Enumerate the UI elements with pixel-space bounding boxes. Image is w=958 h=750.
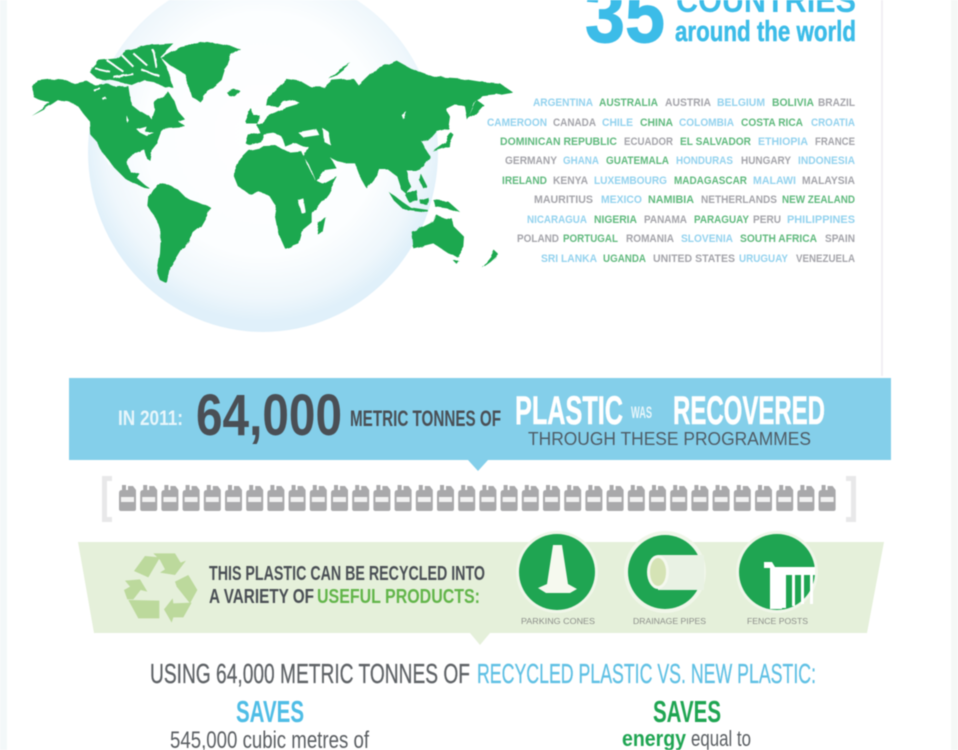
- list of countries: BELGIUM: [717, 97, 765, 109]
- list of countries: DOMINICAN REPUBLIC: [500, 136, 617, 148]
- banner: plastic recovered: METRIC TONNES OF: [350, 406, 501, 431]
- list of countries: GHANA: [563, 155, 599, 167]
- list of countries: SLOVENIA: [681, 233, 733, 245]
- list of countries: PANAMA: [644, 214, 687, 226]
- list of countries: NIGERIA: [594, 214, 637, 226]
- list of countries: [487, 97, 855, 265]
- headline: 35 countries around the world: [585, 0, 856, 59]
- list of countries: SOUTH AFRICA: [740, 233, 817, 245]
- list of countries: ECUADOR: [624, 136, 673, 148]
- list of countries: URUGUAY: [739, 253, 789, 265]
- list of countries: INDONESIA: [798, 155, 855, 167]
- stat: saves water: [170, 694, 369, 750]
- list of countries: CANADA: [553, 117, 596, 129]
- list of countries: CROATIA: [811, 117, 855, 129]
- list of countries: MALAYSIA: [802, 175, 855, 187]
- list of countries: PERU: [753, 214, 781, 226]
- icon: drainage pipes: DRAINAGE PIPES: [633, 616, 706, 626]
- list of countries: CHILE: [602, 117, 633, 129]
- world map: [32, 41, 513, 283]
- list of countries: PARAGUAY: [694, 214, 750, 226]
- list of countries: SRI LANKA: [541, 253, 597, 265]
- panel: recycled products band: [78, 542, 884, 645]
- list of countries: CHINA: [640, 117, 673, 129]
- icon: fence posts: [736, 531, 818, 626]
- text: recycled into useful products: USEFUL PRODUCTS:: [317, 586, 480, 608]
- banner: plastic recovered: IN 2011:: [118, 407, 183, 430]
- list of countries: EL SALVADOR: [680, 136, 751, 148]
- list of countries: HONDURAS: [676, 155, 733, 167]
- list of countries: NAMIBIA: [648, 194, 694, 206]
- list of countries: NETHERLANDS: [701, 194, 777, 206]
- globe: [88, 0, 438, 332]
- list of countries: PORTUGAL: [563, 233, 618, 245]
- list of countries: SPAIN: [825, 233, 855, 245]
- bottle row: [102, 476, 856, 522]
- text: recycled into useful products: A VARIETY OF: [209, 586, 314, 608]
- banner: plastic recovered: THROUGH THESE PROGRAMMES: [528, 429, 811, 449]
- banner: plastic recovered: WAS: [631, 403, 652, 422]
- list of countries: ETHIOPIA: [758, 136, 808, 148]
- list of countries: ROMANIA: [626, 233, 674, 245]
- list of countries: VENEZUELA: [796, 253, 855, 265]
- list of countries: COSTA RICA: [741, 117, 803, 129]
- icon: fence posts: FENCE POSTS: [747, 616, 808, 626]
- list of countries: ARGENTINA: [533, 97, 593, 109]
- text: recycled into useful products: THIS PLASTIC CAN BE RECYCLED INTO: [209, 563, 485, 585]
- heading: using recycled plastic vs new plastic: USING 64,000 METRIC TONNES OF: [150, 658, 470, 689]
- list of countries: MAURITIUS: [534, 194, 593, 206]
- banner: plastic recovered: PLASTIC: [515, 389, 623, 433]
- list of countries: GERMANY: [505, 155, 558, 167]
- icon: drainage pipes: [624, 531, 706, 626]
- list of countries: MADAGASCAR: [674, 175, 747, 187]
- list of countries: IRELAND: [502, 175, 547, 187]
- list of countries: MALAWI: [753, 175, 796, 187]
- banner: plastic recovered: [69, 378, 891, 471]
- list of countries: LUXEMBOURG: [594, 175, 667, 187]
- list of countries: AUSTRIA: [665, 97, 711, 109]
- list of countries: POLAND: [517, 233, 559, 245]
- list of countries: MEXICO: [601, 194, 642, 206]
- list of countries: AUSTRALIA: [599, 97, 658, 109]
- headline: 35 countries around the world: around the world: [675, 16, 856, 48]
- banner: plastic recovered: RECOVERED: [673, 389, 825, 433]
- list of countries: COLOMBIA: [679, 117, 734, 129]
- text: recycled into useful products: [209, 563, 485, 608]
- stat: saves energy: [622, 694, 751, 750]
- list of countries: UGANDA: [603, 253, 646, 265]
- list of countries: FRANCE: [815, 136, 855, 148]
- list of countries: GUATEMALA: [606, 155, 669, 167]
- list of countries: NICARAGUA: [527, 214, 587, 226]
- list of countries: KENYA: [553, 175, 588, 187]
- list of countries: NEW ZEALAND: [782, 194, 855, 206]
- icon: recycle symbol: [124, 553, 197, 623]
- icon: parking cones: [516, 531, 598, 626]
- list of countries: UNITED STATES: [653, 253, 735, 265]
- banner: plastic recovered: 64,000: [196, 383, 342, 448]
- list of countries: BRAZIL: [818, 97, 855, 109]
- stat: saves energy: SAVES: [653, 694, 721, 729]
- list of countries: PHILIPPINES: [787, 214, 855, 226]
- list of countries: CAMEROON: [487, 117, 547, 129]
- list of countries: HUNGARY: [741, 155, 792, 167]
- icon: parking cones: PARKING CONES: [521, 616, 595, 626]
- list of countries: BOLIVIA: [772, 97, 814, 109]
- stat: saves water: SAVES: [236, 694, 304, 729]
